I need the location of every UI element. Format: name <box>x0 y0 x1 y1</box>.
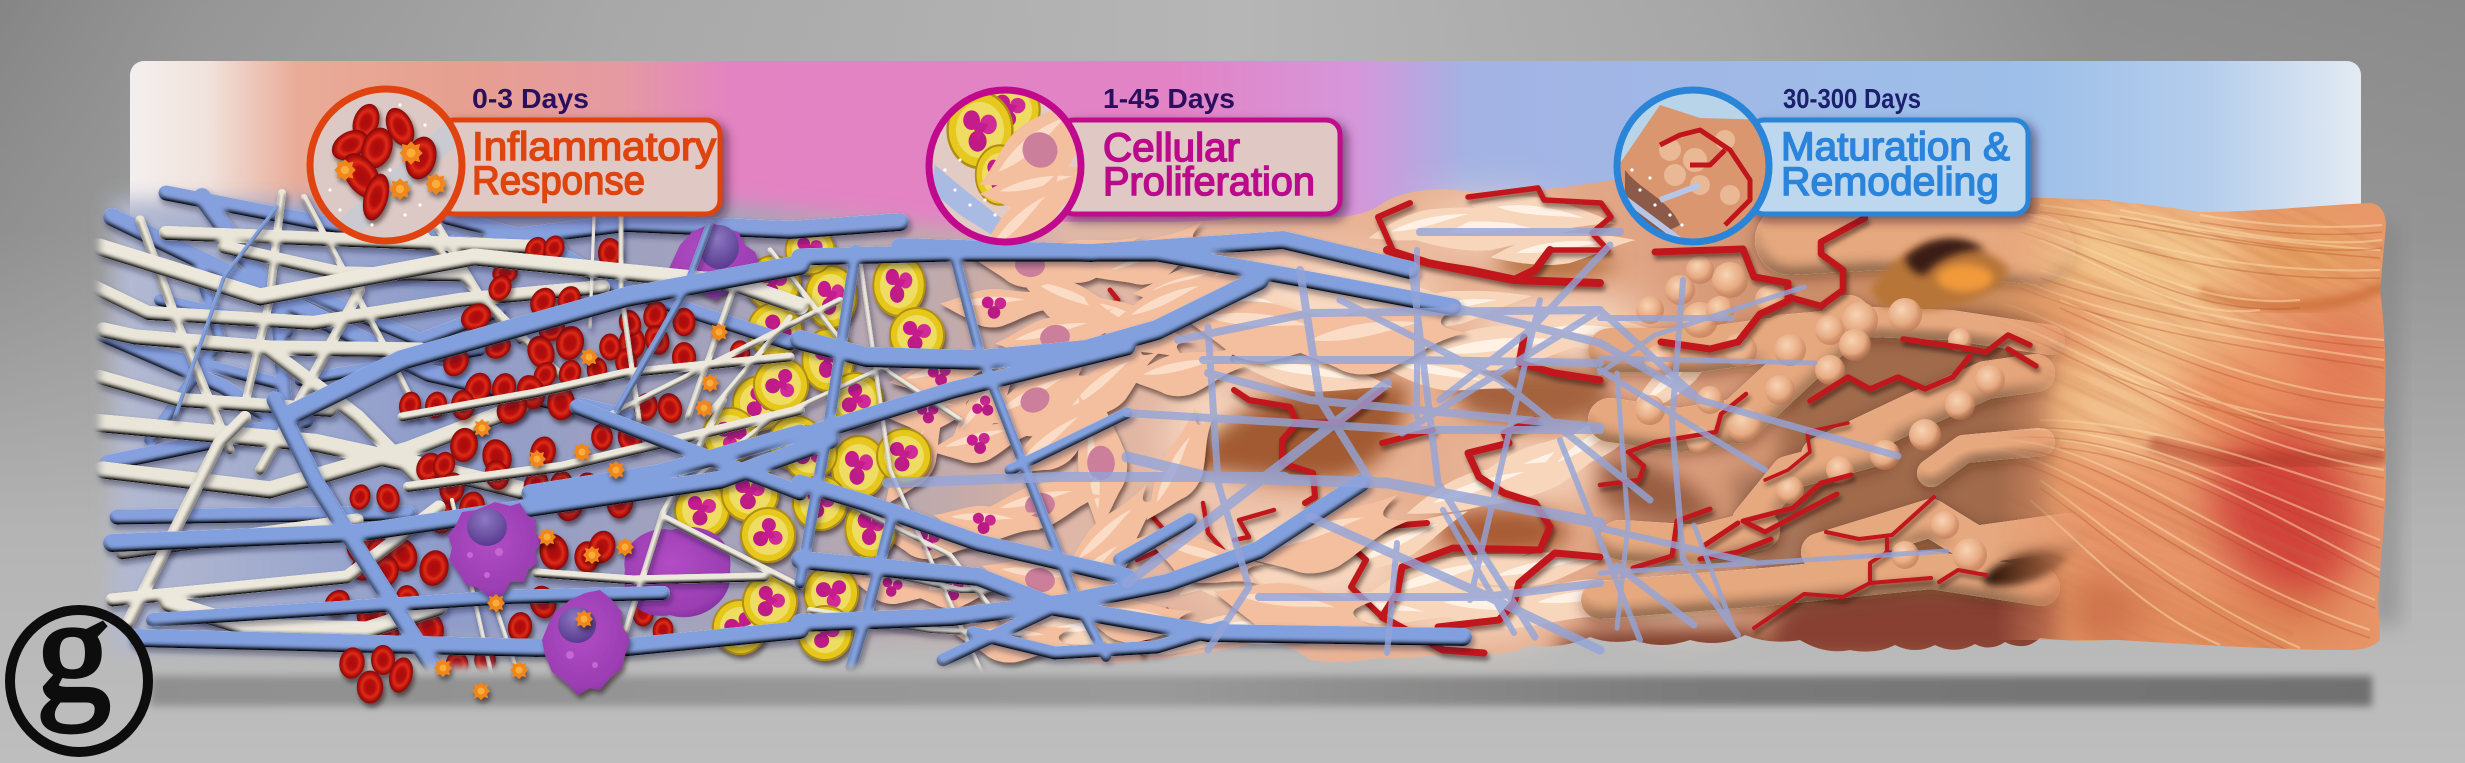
icon: neutrophils and fibroblasts <box>932 94 1078 238</box>
macrophage behind fibers <box>624 527 730 617</box>
phase title: Inflammatory <box>472 125 716 169</box>
fine striations <box>2054 212 2356 648</box>
dark creases <box>2150 442 2386 461</box>
floor shadow <box>150 676 2372 706</box>
icon: remodeling tissue <box>1612 88 1771 250</box>
tissue shadow right <box>2370 225 2400 625</box>
under fibers <box>99 193 900 520</box>
panel: muscle fibers <box>2000 198 2386 650</box>
phase title: Cellular <box>1103 126 1240 170</box>
remodeling ridges <box>1600 235 2069 600</box>
phase title: Remodeling <box>1781 160 1999 204</box>
phase title: Response <box>472 159 645 203</box>
pale flesh highlights <box>1170 203 1740 636</box>
platelets <box>434 323 728 700</box>
duration: 0-3 Days <box>472 83 589 114</box>
panel: fibrin scaffold backing <box>112 200 1050 650</box>
pale spindle folds <box>1019 188 1747 658</box>
panel: phase gradient banner <box>130 61 2361 321</box>
blood vessels <box>1060 188 2036 653</box>
macrophage top <box>664 223 760 300</box>
icon: blood cells and platelets <box>314 92 456 238</box>
duration: 30-300 Days <box>1783 83 1921 114</box>
duration: 1-45 Days <box>1103 83 1235 114</box>
callout: cellular proliferation <box>926 86 1354 246</box>
label pill <box>440 120 720 214</box>
logo <box>10 567 148 752</box>
dark holes <box>1870 238 2070 586</box>
macrophage 1 <box>448 502 542 598</box>
phase title: Maturation & <box>1781 125 2010 169</box>
callout: inflammatory response <box>308 83 720 243</box>
logo: g <box>36 567 111 733</box>
muscle colour field <box>2005 202 2385 647</box>
tissue nodules <box>1635 256 2005 572</box>
callout: maturation and remodeling <box>1612 83 2028 250</box>
translucent collagen fibers <box>887 232 1947 653</box>
phase title: Proliferation <box>1103 160 1315 204</box>
fibroblast cells <box>845 219 1472 668</box>
brown shaded gaps <box>1180 250 2060 660</box>
red blood cells <box>319 233 750 679</box>
light strands <box>1990 205 2384 648</box>
panel: proliferating tissue <box>960 171 2110 663</box>
panel: fibrin scaffold <box>94 193 1463 690</box>
label pill <box>1750 120 2028 214</box>
neutrophils <box>675 226 944 664</box>
loose blood cells below scaffold <box>337 645 417 704</box>
over fibers <box>99 217 1020 690</box>
label pill <box>1060 120 1340 214</box>
macrophage 2 <box>542 590 630 695</box>
macrophages <box>448 502 630 695</box>
